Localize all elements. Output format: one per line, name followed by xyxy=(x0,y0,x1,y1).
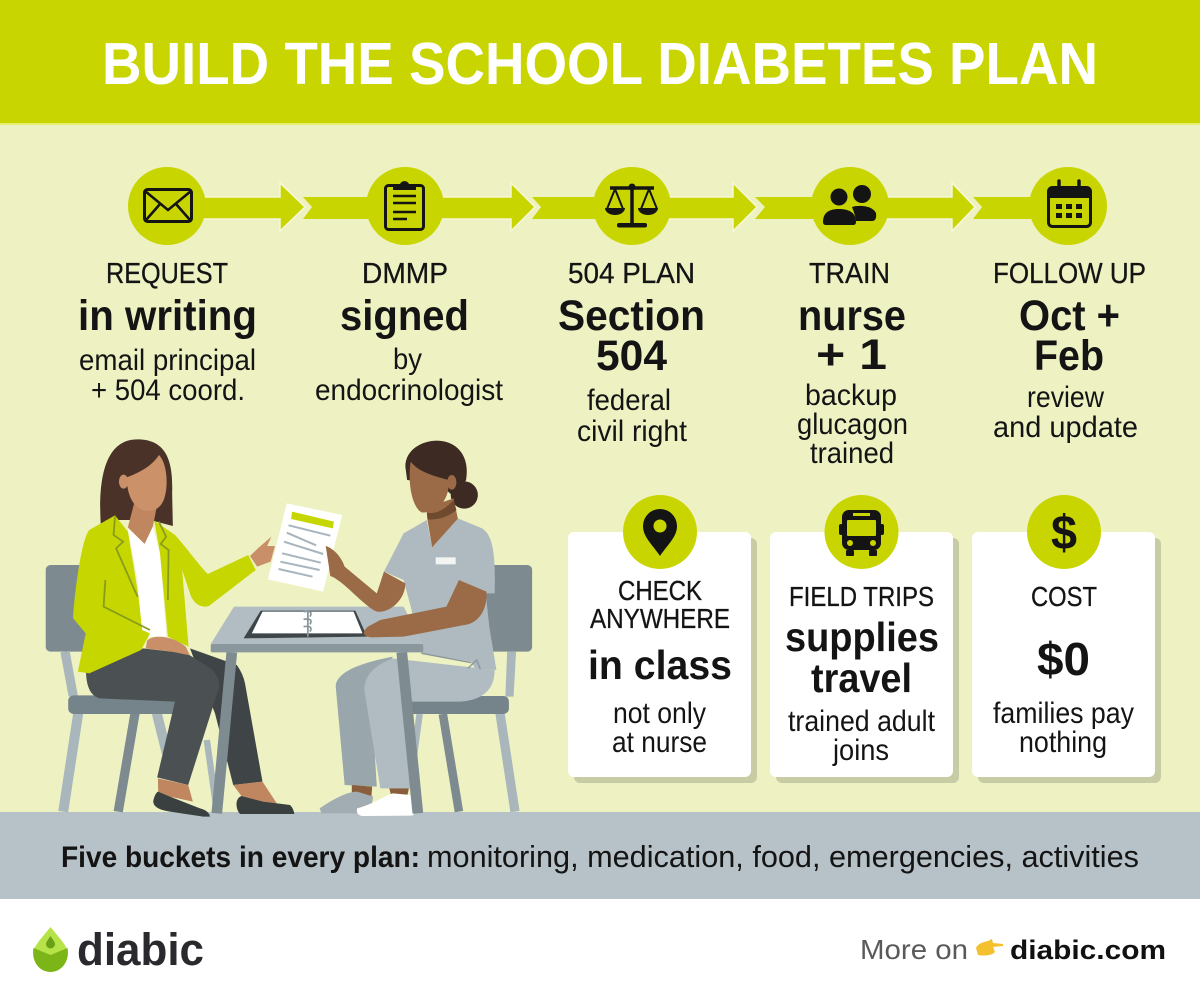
card text: supplies xyxy=(785,614,939,660)
step 5 text xyxy=(993,258,1146,444)
step 2: DMMP xyxy=(315,167,503,407)
icon: location pin xyxy=(623,495,697,569)
process arrows xyxy=(190,183,1090,231)
card text: nothing xyxy=(1019,726,1107,759)
card text: COST xyxy=(1031,581,1097,612)
panel: check anywhere xyxy=(568,495,757,783)
step 1 text: REQUEST xyxy=(106,258,228,290)
step 5 text: review xyxy=(1027,381,1105,414)
card text xyxy=(588,575,732,759)
card text: at nurse xyxy=(612,726,707,759)
woman far leg xyxy=(190,648,262,785)
card text xyxy=(785,581,939,767)
step 4 text: trained xyxy=(810,437,894,470)
panel: field trips xyxy=(770,495,959,783)
document being handed over xyxy=(268,503,342,592)
step 5 text: and update xyxy=(993,411,1138,444)
step 1 text: in writing xyxy=(78,292,257,340)
title banner xyxy=(0,0,1200,125)
step 5 text: Oct + xyxy=(1019,292,1120,340)
icon: clipboard xyxy=(366,167,444,245)
footer bar: five buckets xyxy=(0,812,1200,899)
step 2 text: endocrinologist xyxy=(315,374,503,407)
link: more on diabic.com: More on xyxy=(860,934,968,965)
icon: dollar sign: $ xyxy=(1051,507,1077,560)
step 2 text: by xyxy=(393,343,422,376)
footer white band xyxy=(0,899,1200,1000)
nurse xyxy=(320,441,496,816)
nurse hand on document xyxy=(326,546,345,577)
nurse arms xyxy=(326,547,487,637)
link: more on diabic.com: diabic.com xyxy=(1010,935,1166,965)
icon: pointing hand xyxy=(976,939,1003,956)
card text: not only xyxy=(613,697,706,730)
card text: in class xyxy=(588,642,732,688)
step 4 text: backup xyxy=(805,379,897,412)
card text: FIELD TRIPS xyxy=(789,581,934,612)
step 1 text: + 504 coord. xyxy=(91,374,245,407)
title: BUILD THE SCHOOL DIABETES PLAN xyxy=(102,31,1098,97)
page background xyxy=(0,124,1200,814)
step 4: train xyxy=(797,167,908,470)
step 5 text: FOLLOW UP xyxy=(993,258,1146,290)
left chair xyxy=(46,565,217,812)
card text: $0 xyxy=(1037,633,1090,685)
icon: leaf drop xyxy=(33,927,68,972)
step 3 text xyxy=(558,258,705,448)
icon: dollar sign xyxy=(1027,495,1101,569)
step 5: follow up xyxy=(993,167,1146,444)
panel: cost xyxy=(972,495,1161,783)
step 3 text: civil right xyxy=(577,415,687,448)
right chair xyxy=(402,565,532,812)
step 2 text: signed xyxy=(340,292,469,340)
logo: diabic xyxy=(33,924,204,975)
step 1 text: email principal xyxy=(79,344,256,377)
table xyxy=(211,607,423,813)
step 4 text xyxy=(797,258,908,470)
woman xyxy=(73,439,294,817)
step 1: request xyxy=(78,167,257,407)
card text: CHECK xyxy=(618,575,702,606)
icon: envelope xyxy=(128,167,206,245)
illustration: woman and nurse at table xyxy=(46,439,532,817)
card text xyxy=(993,581,1134,759)
step 3 text: 504 xyxy=(596,332,667,380)
binder xyxy=(244,610,367,638)
step 4 text: nurse xyxy=(798,292,906,340)
icon: scales xyxy=(593,167,671,245)
step 3 text: Section xyxy=(558,292,705,340)
step 4 text: glucagon xyxy=(797,408,908,441)
step 3: 504 plan xyxy=(558,167,705,448)
step 4 text: TRAIN xyxy=(809,258,890,290)
step 1 text xyxy=(78,258,257,407)
step 3 text: federal xyxy=(587,384,671,417)
link: more on diabic.com xyxy=(860,934,1166,965)
step 2 text xyxy=(315,258,503,407)
footer bar: five buckets: Five buckets in every plan: xyxy=(61,841,420,874)
wordmark: diabic xyxy=(77,924,204,975)
card text: travel xyxy=(811,655,912,701)
step 2 text: DMMP xyxy=(362,258,448,290)
card text: trained adult xyxy=(788,705,935,738)
card text: joins xyxy=(832,734,889,767)
card text: families pay xyxy=(993,697,1134,730)
step 4 text: + 1 xyxy=(816,331,887,379)
icon: calendar xyxy=(1029,167,1107,245)
step 5 text: Feb xyxy=(1034,332,1104,380)
icon: bus xyxy=(824,495,898,569)
card text: ANYWHERE xyxy=(590,603,730,634)
step 3 text: 504 PLAN xyxy=(568,258,695,290)
footer bar: five buckets: monitoring, medication, food, emergencies, activities xyxy=(427,839,1139,874)
icon: people xyxy=(811,167,889,245)
